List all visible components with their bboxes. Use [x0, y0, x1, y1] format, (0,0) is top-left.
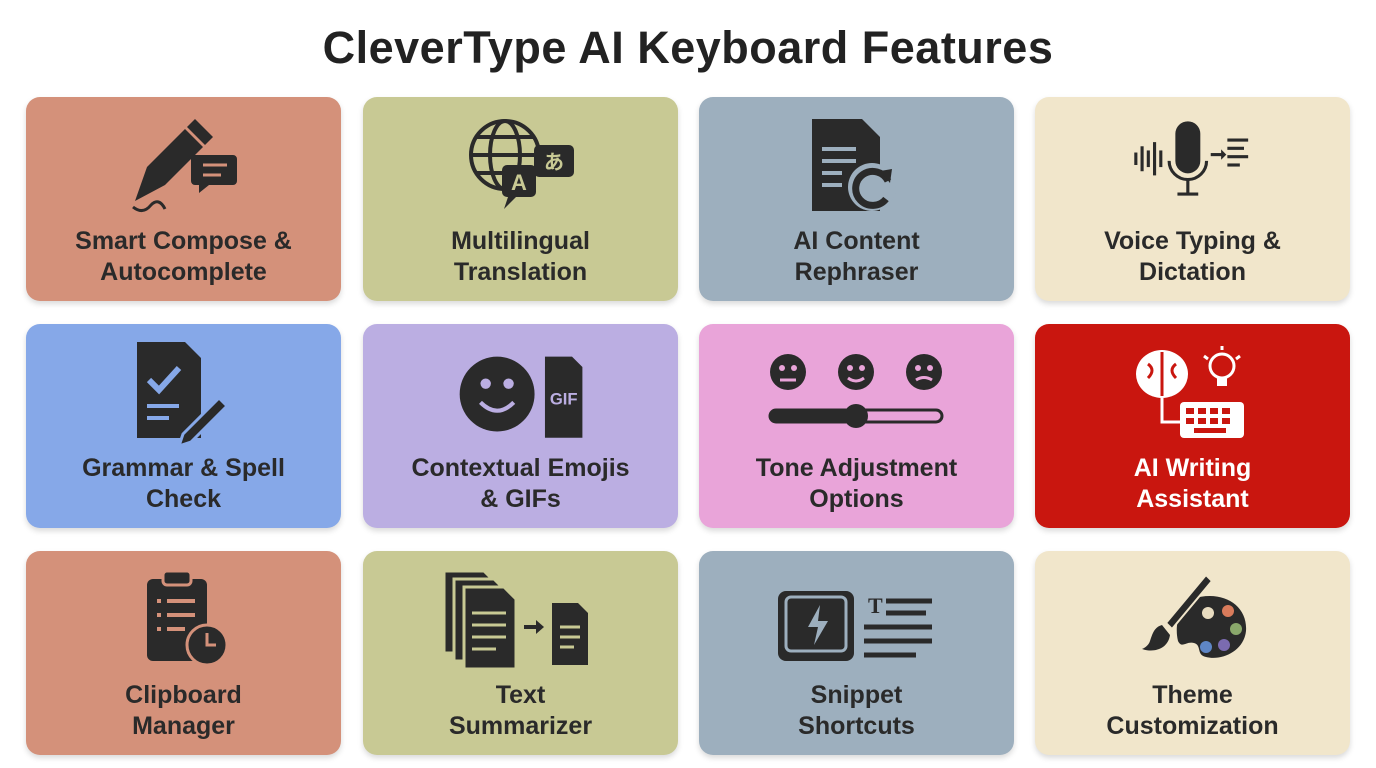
label: Theme — [1152, 681, 1233, 709]
label: Rephraser — [795, 258, 918, 286]
label: Text — [496, 681, 545, 709]
label: Check — [146, 485, 221, 513]
label — [1106, 681, 1279, 740]
card: Text Summarizer — [363, 551, 678, 755]
card: Clipboard Manager — [26, 551, 341, 755]
card: Emojis — [363, 324, 678, 528]
card: Multilingual Translation — [363, 97, 678, 301]
icon: clipboard clock — [147, 572, 226, 664]
icon: palette brush — [1142, 576, 1246, 658]
icon: pen with chat — [132, 119, 237, 212]
label: Options — [809, 485, 904, 513]
label — [125, 681, 242, 740]
icon: globe translate: あ — [544, 146, 564, 175]
label: Multilingual — [451, 227, 590, 255]
label — [451, 227, 590, 286]
card: Tone Adjustment — [699, 324, 1014, 528]
label: Contextual Emojis — [411, 454, 630, 482]
card: Theme Customization — [1035, 551, 1350, 755]
label: Customization — [1106, 712, 1279, 740]
icon: globe translate: A — [511, 170, 527, 195]
icon: smiley gif — [460, 356, 582, 438]
label — [82, 454, 285, 513]
icon: brain keyboard bulb — [1136, 346, 1244, 438]
label: Summarizer — [449, 712, 592, 740]
label — [411, 454, 630, 513]
card: Smart Compose — [26, 97, 341, 301]
label: Grammar & Spell — [82, 454, 285, 482]
label: Dictation — [1139, 258, 1246, 286]
card: AI Content Rephraser — [699, 97, 1014, 301]
card: AI Writing Assistant — [1035, 324, 1350, 528]
label: & GIFs — [480, 485, 561, 513]
label — [793, 227, 920, 286]
label: Snippet — [811, 681, 902, 709]
label — [756, 454, 957, 513]
label — [75, 227, 292, 286]
label: AI Content — [793, 227, 920, 255]
icon: document refresh — [812, 119, 892, 211]
icon: globe translate — [469, 119, 574, 209]
label — [449, 681, 592, 740]
label: Smart Compose & — [75, 227, 292, 255]
label — [1104, 227, 1281, 286]
label: Tone Adjustment — [756, 454, 957, 482]
icon: docs to doc — [446, 572, 588, 668]
label: Manager — [132, 712, 235, 740]
title: CleverType AI Keyboard Features — [323, 22, 1053, 73]
card: Snippet Shortcuts — [699, 551, 1014, 755]
label: Voice Typing & — [1104, 227, 1281, 255]
label: Autocomplete — [100, 258, 267, 286]
icon: faces slider — [768, 354, 944, 428]
icon: smiley gif: GIF — [550, 389, 578, 408]
label: AI Writing — [1134, 454, 1251, 482]
icon: key and text: T — [868, 593, 883, 618]
label: Translation — [454, 258, 587, 286]
label: Shortcuts — [798, 712, 915, 740]
card: Voice Typing — [1035, 97, 1350, 301]
label — [1134, 454, 1251, 513]
label: Assistant — [1136, 485, 1249, 513]
label: Clipboard — [125, 681, 242, 709]
card: Grammar — [26, 324, 341, 528]
icon: key and text — [778, 591, 932, 661]
icon: mic wave — [1134, 121, 1248, 196]
icon: doc check pencil — [137, 342, 225, 444]
label — [798, 681, 915, 740]
